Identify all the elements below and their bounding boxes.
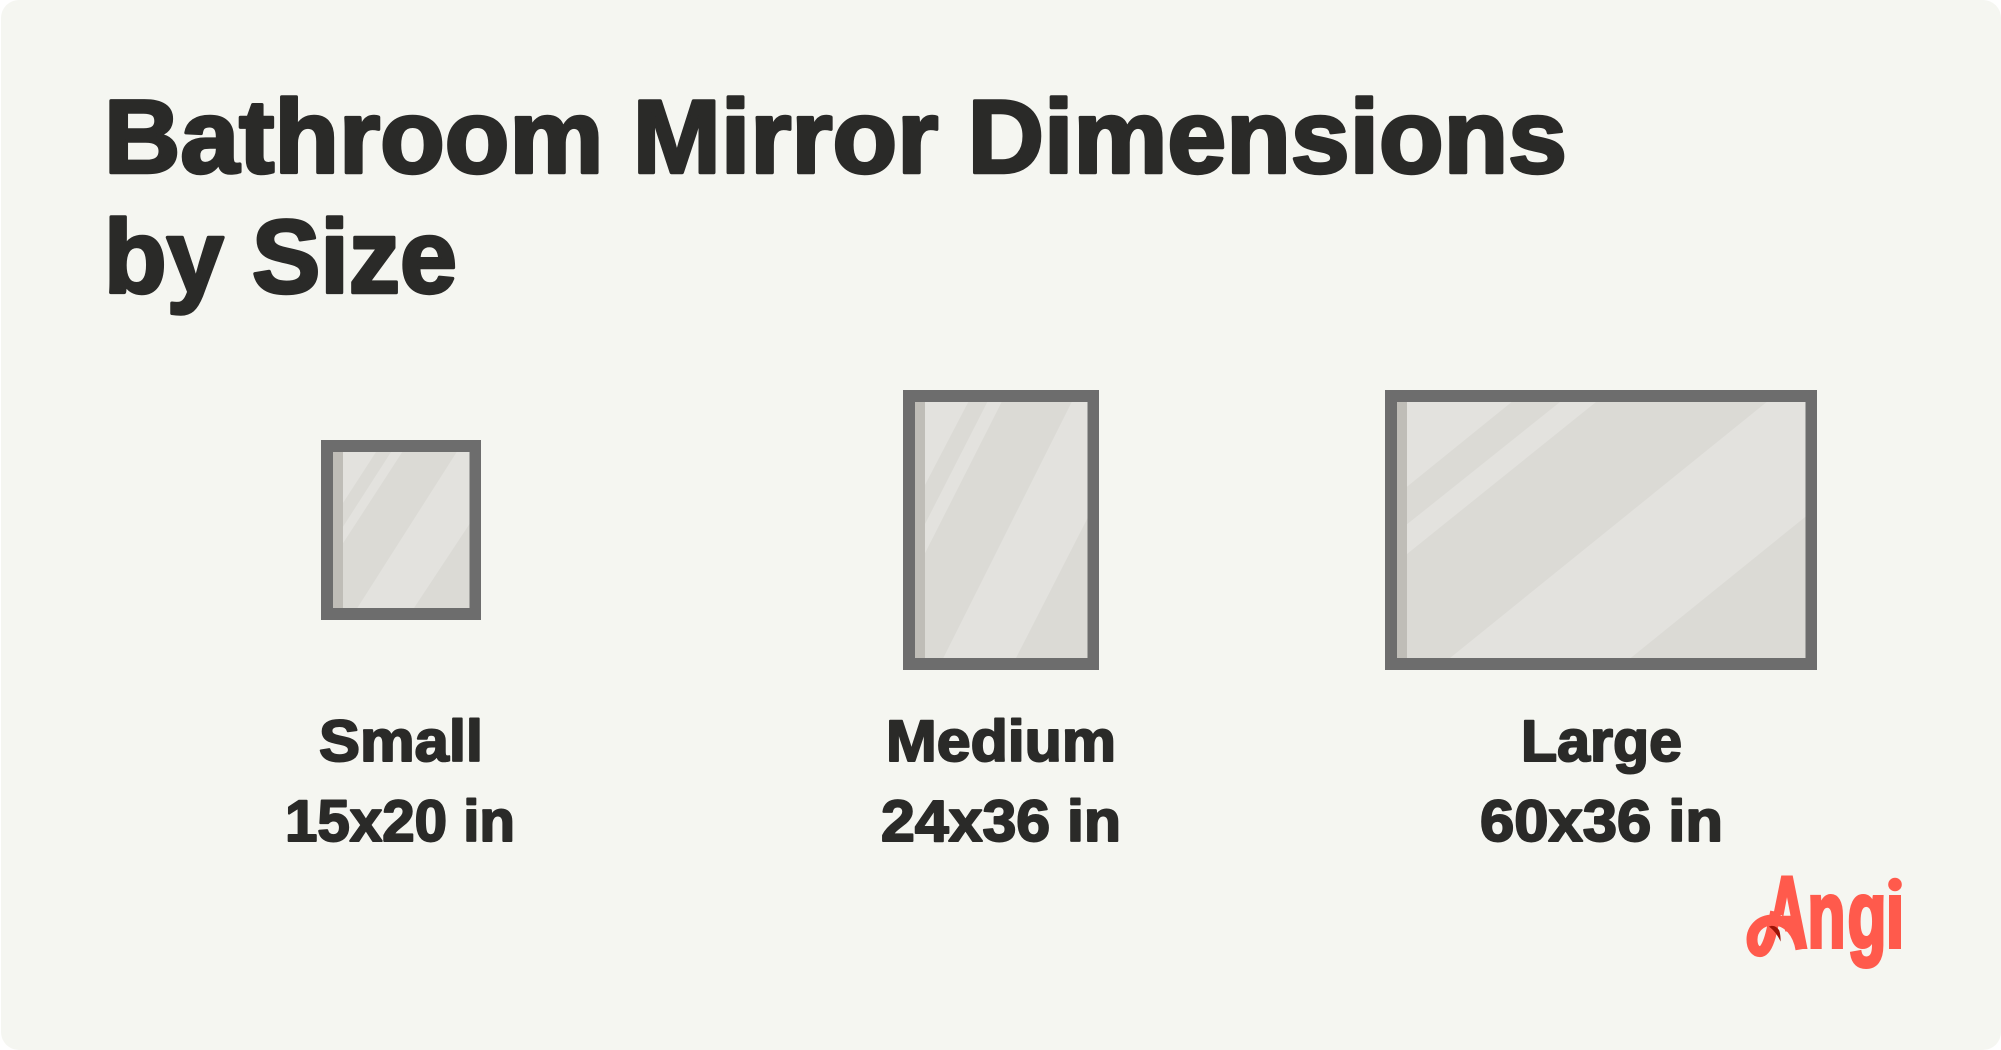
- logo: Angi: [1746, 876, 1902, 969]
- label: medium: [881, 709, 1121, 854]
- logo: Angi: A: [1767, 856, 1807, 968]
- logo: Angi: n: [1808, 862, 1846, 968]
- label: medium: Medium: [886, 709, 1116, 774]
- label: small: 15x20 in: [285, 789, 515, 854]
- label: large: 60x36 in: [1480, 789, 1723, 854]
- label: large: Large: [1521, 709, 1682, 774]
- label: medium: 24x36 in: [881, 789, 1121, 854]
- mirror: large: [1385, 390, 1817, 670]
- label: small: Small: [319, 709, 483, 774]
- mirror: medium: [903, 390, 1099, 670]
- label: large: [1480, 709, 1723, 854]
- label: small: [285, 709, 515, 854]
- logo: Angi: g: [1848, 862, 1886, 968]
- title: [104, 80, 1567, 316]
- title: Bathroom Mirror Dimensions: [104, 80, 1567, 196]
- title: by Size: [104, 200, 457, 316]
- mirror: small: [321, 440, 481, 620]
